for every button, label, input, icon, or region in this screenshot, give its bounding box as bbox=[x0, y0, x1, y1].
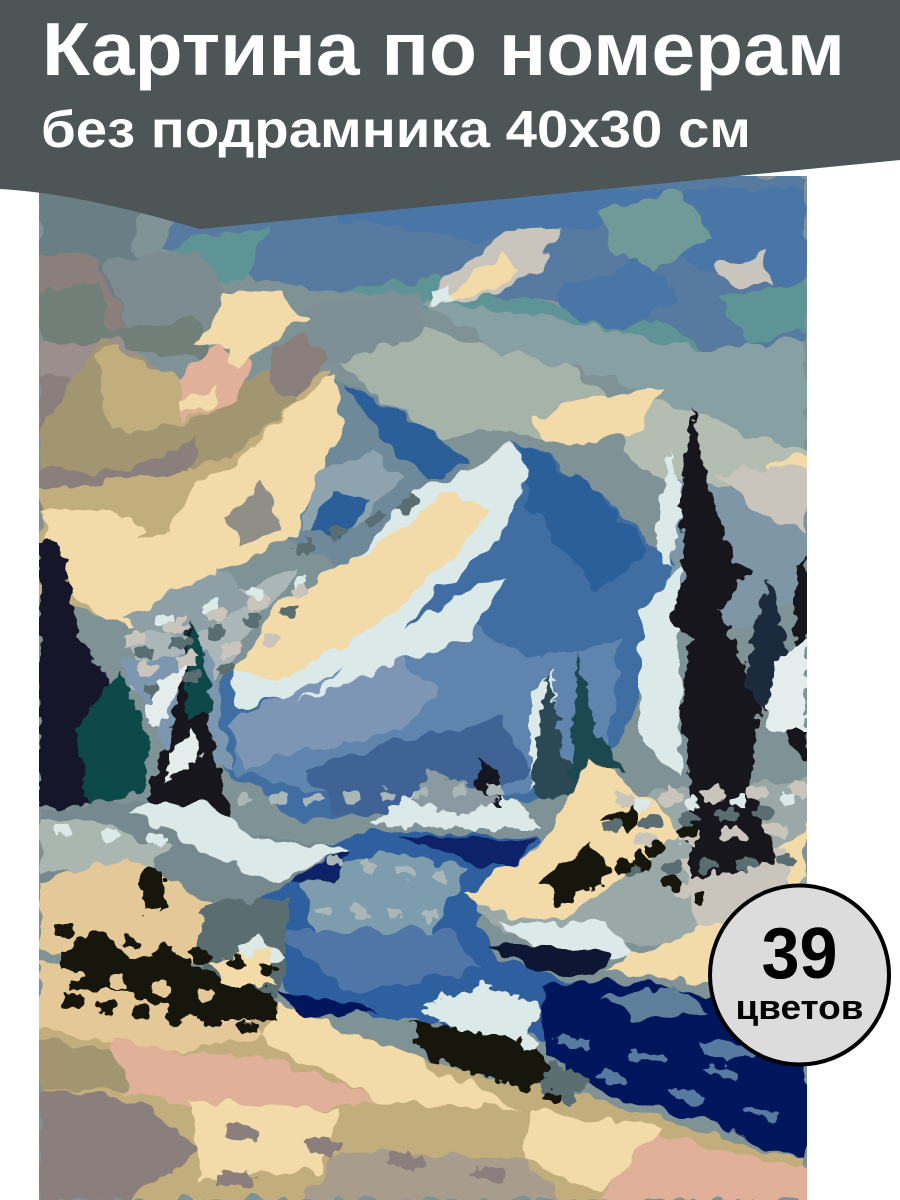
left trees bbox=[39, 540, 230, 830]
bushes bbox=[60, 870, 590, 1105]
sky and clouds bbox=[39, 176, 807, 620]
right snowy slope bbox=[460, 560, 807, 985]
right large fir tree bbox=[655, 405, 807, 880]
distant right hills bbox=[670, 465, 807, 640]
main mountain bbox=[120, 440, 670, 820]
header banner bbox=[0, 0, 900, 229]
painting: snowy mountain landscape bbox=[39, 176, 807, 1200]
middle trees and snow bank bbox=[370, 650, 625, 830]
subtitle: size: без подрамника 40х30 см bbox=[41, 101, 751, 159]
left mountain bbox=[39, 372, 470, 630]
badge: 39 colours bbox=[710, 886, 889, 1064]
badge: 39 colours: 39 bbox=[762, 914, 838, 994]
paint-by-number speckle texture bbox=[60, 500, 800, 1190]
river bbox=[230, 830, 807, 1160]
foreground sand bbox=[39, 960, 807, 1200]
left snow bank bbox=[39, 800, 350, 1010]
title: main heading: Картина по номерам bbox=[42, 7, 845, 91]
badge: 39 colours: цветов bbox=[736, 989, 864, 1027]
